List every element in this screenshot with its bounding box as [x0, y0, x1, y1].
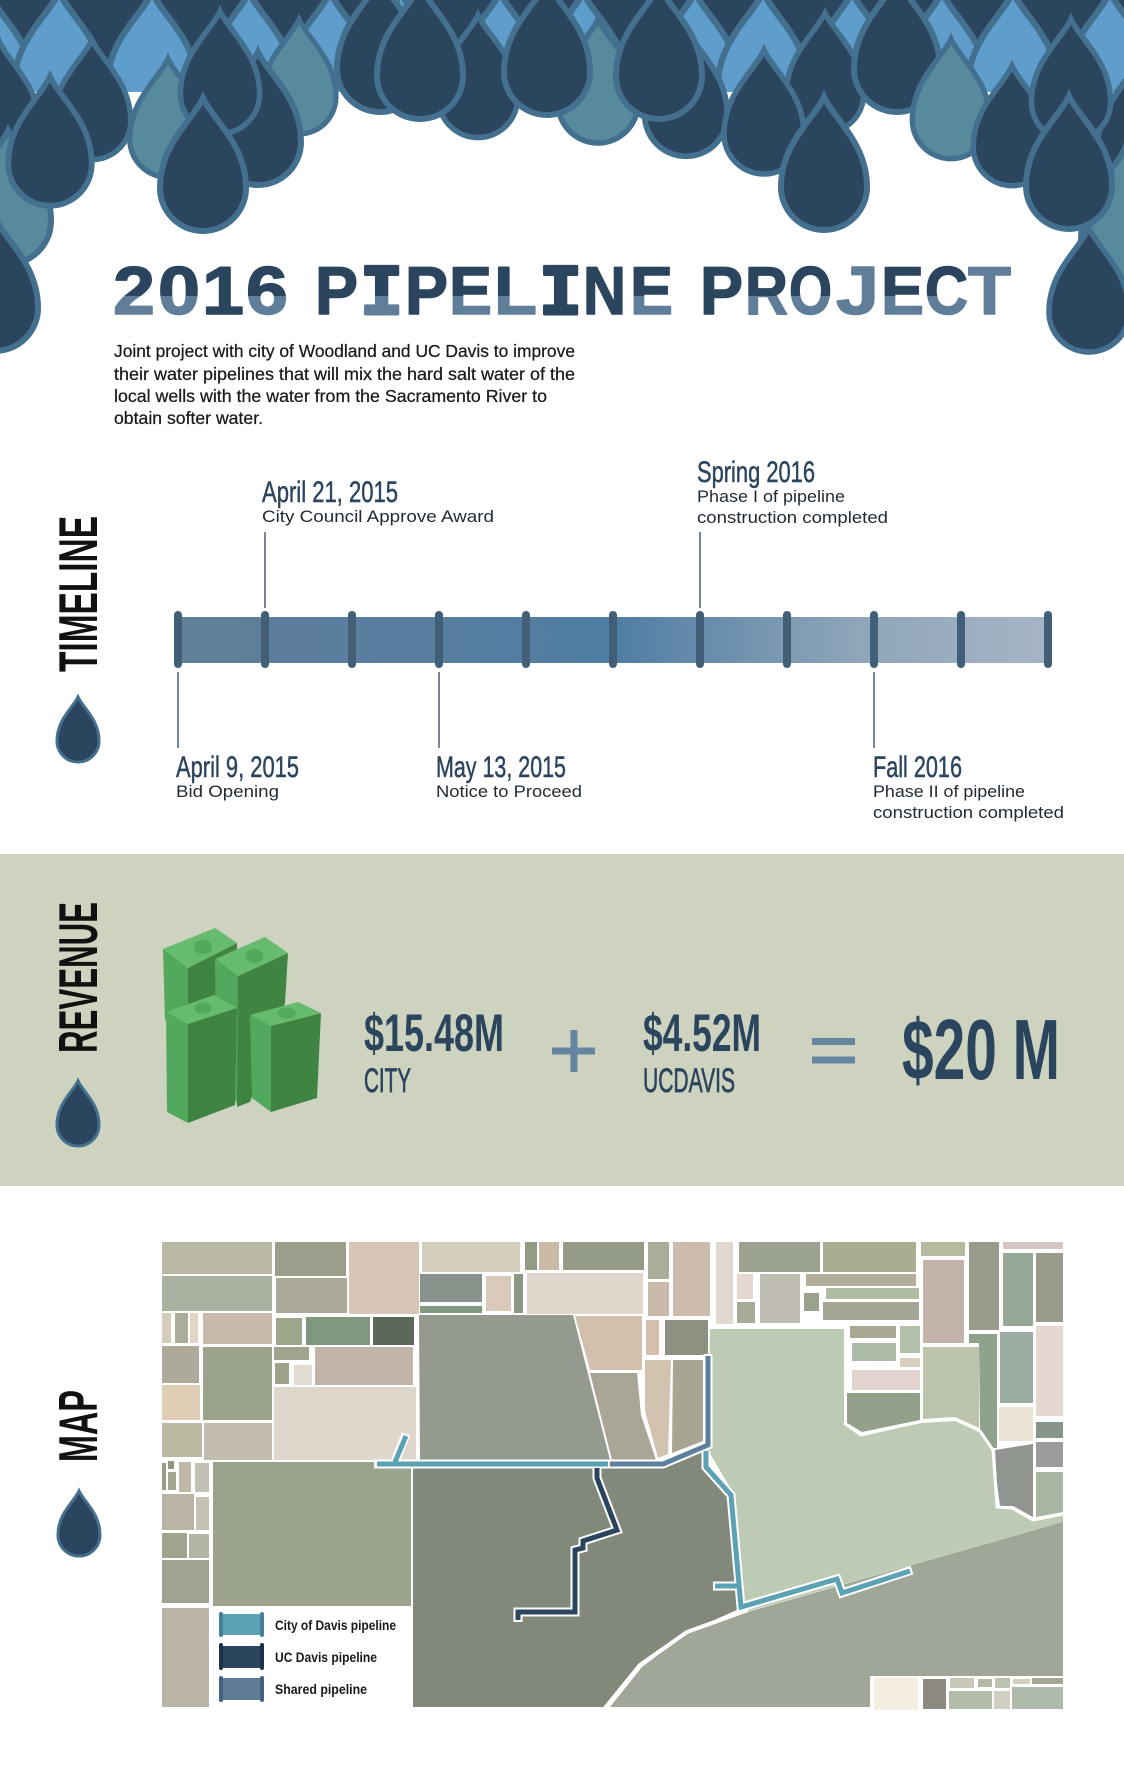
legend: city of Davis pipeline — [219, 1612, 396, 1637]
milestone: Spring 2016: construction completed — [697, 508, 888, 527]
title: 1 — [202, 253, 244, 329]
icon: map drop — [58, 1491, 100, 1556]
panel: revenue — [0, 854, 1124, 1186]
map — [162, 1242, 1063, 1710]
map: dark region — [413, 1450, 737, 1707]
title: I — [539, 254, 582, 336]
intro paragraph: obtain softer water. — [114, 408, 263, 428]
title: E — [630, 253, 673, 329]
title — [113, 253, 1011, 336]
revenue: city amount: CITY — [364, 1062, 411, 1100]
intro paragraph — [114, 341, 575, 428]
title: C — [925, 253, 968, 329]
revenue: UC Davis amount: UCDAVIS — [643, 1062, 735, 1100]
map: bottom right parcels — [870, 1676, 1063, 1710]
map: lower region — [610, 1522, 1063, 1707]
timeline chart — [174, 456, 1064, 822]
milestone: May 13, 2015 — [436, 751, 582, 801]
legend: shared pipeline: Shared pipeline — [275, 1681, 367, 1697]
title: O — [789, 253, 832, 329]
pipeline casing — [374, 1354, 912, 1622]
section heading: map: MAP — [47, 1390, 109, 1462]
title: P — [700, 253, 743, 329]
map: right side parcels — [844, 1326, 1063, 1520]
map parcels — [162, 1242, 1063, 1707]
milestone: Fall 2016: Phase II of pipeline — [873, 782, 1025, 801]
milestone: Spring 2016: Phase I of pipeline — [697, 487, 845, 506]
icon: timeline drop — [57, 697, 99, 762]
milestone: April 9, 2015 — [176, 751, 299, 801]
header raindrops — [0, 0, 1124, 352]
section heading: revenue: REVENUE — [47, 902, 109, 1053]
equals sign — [812, 1042, 855, 1060]
title: P — [315, 253, 358, 329]
title: R — [745, 253, 788, 329]
shared pipeline — [610, 1356, 708, 1464]
milestone: Fall 2016: construction completed — [873, 803, 1064, 822]
intro paragraph: their water pipelines that will mix the hard salt water of the — [114, 364, 575, 384]
milestone: April 9, 2015: April 9, 2015 — [176, 751, 299, 784]
title: L — [494, 253, 537, 329]
revenue: city amount — [364, 1004, 504, 1100]
map legend — [219, 1612, 396, 1702]
section heading: timeline: TIMELINE — [47, 516, 109, 672]
icon: revenue drop — [57, 1081, 99, 1146]
title: J — [836, 253, 879, 329]
revenue: city amount: $15.48M — [364, 1004, 504, 1063]
title: I — [360, 254, 403, 336]
milestone: April 21, 2015: April 21, 2015 — [262, 476, 398, 509]
icon: money stacks — [163, 928, 321, 1123]
title: T — [968, 253, 1011, 329]
revenue: UC Davis amount — [643, 1004, 761, 1100]
title: E — [881, 253, 924, 329]
title: 2 — [113, 253, 155, 329]
milestone: Fall 2016 — [873, 751, 1064, 822]
title: 0 — [158, 253, 200, 329]
legend: UC Davis pipeline — [219, 1643, 377, 1670]
milestone: April 9, 2015: Bid Opening — [176, 782, 279, 801]
milestone: April 21, 2015 — [262, 476, 494, 526]
city of Davis pipeline — [377, 1436, 910, 1607]
intro paragraph: Joint project with city of Woodland and UC Davis to improve — [114, 341, 575, 361]
plus sign — [552, 1030, 595, 1072]
legend: city of Davis pipeline: City of Davis pipeline — [275, 1617, 396, 1633]
map: large green region — [708, 1329, 1063, 1612]
milestone: Spring 2016: Spring 2016 — [697, 456, 815, 489]
UC Davis pipeline — [518, 1468, 617, 1620]
milestone: May 13, 2015: Notice to Proceed — [436, 782, 582, 801]
intro paragraph: local wells with the water from the Sacramento River to — [114, 386, 547, 406]
legend: UC Davis pipeline: UC Davis pipeline — [275, 1649, 377, 1665]
timeline bar — [178, 617, 1048, 663]
title: P — [405, 253, 448, 329]
title: N — [583, 253, 626, 329]
milestone: May 13, 2015: May 13, 2015 — [436, 751, 566, 784]
milestone: April 21, 2015: City Council Approve Award — [262, 507, 494, 526]
timeline ticks — [174, 611, 1052, 668]
milestone: Spring 2016 — [697, 456, 888, 527]
title: 6 — [246, 253, 288, 329]
title: E — [449, 253, 492, 329]
timeline connector lines — [178, 532, 874, 748]
milestone: Fall 2016: Fall 2016 — [873, 751, 962, 784]
revenue: UC Davis amount: $4.52M — [643, 1004, 761, 1063]
legend: shared pipeline — [219, 1676, 367, 1702]
